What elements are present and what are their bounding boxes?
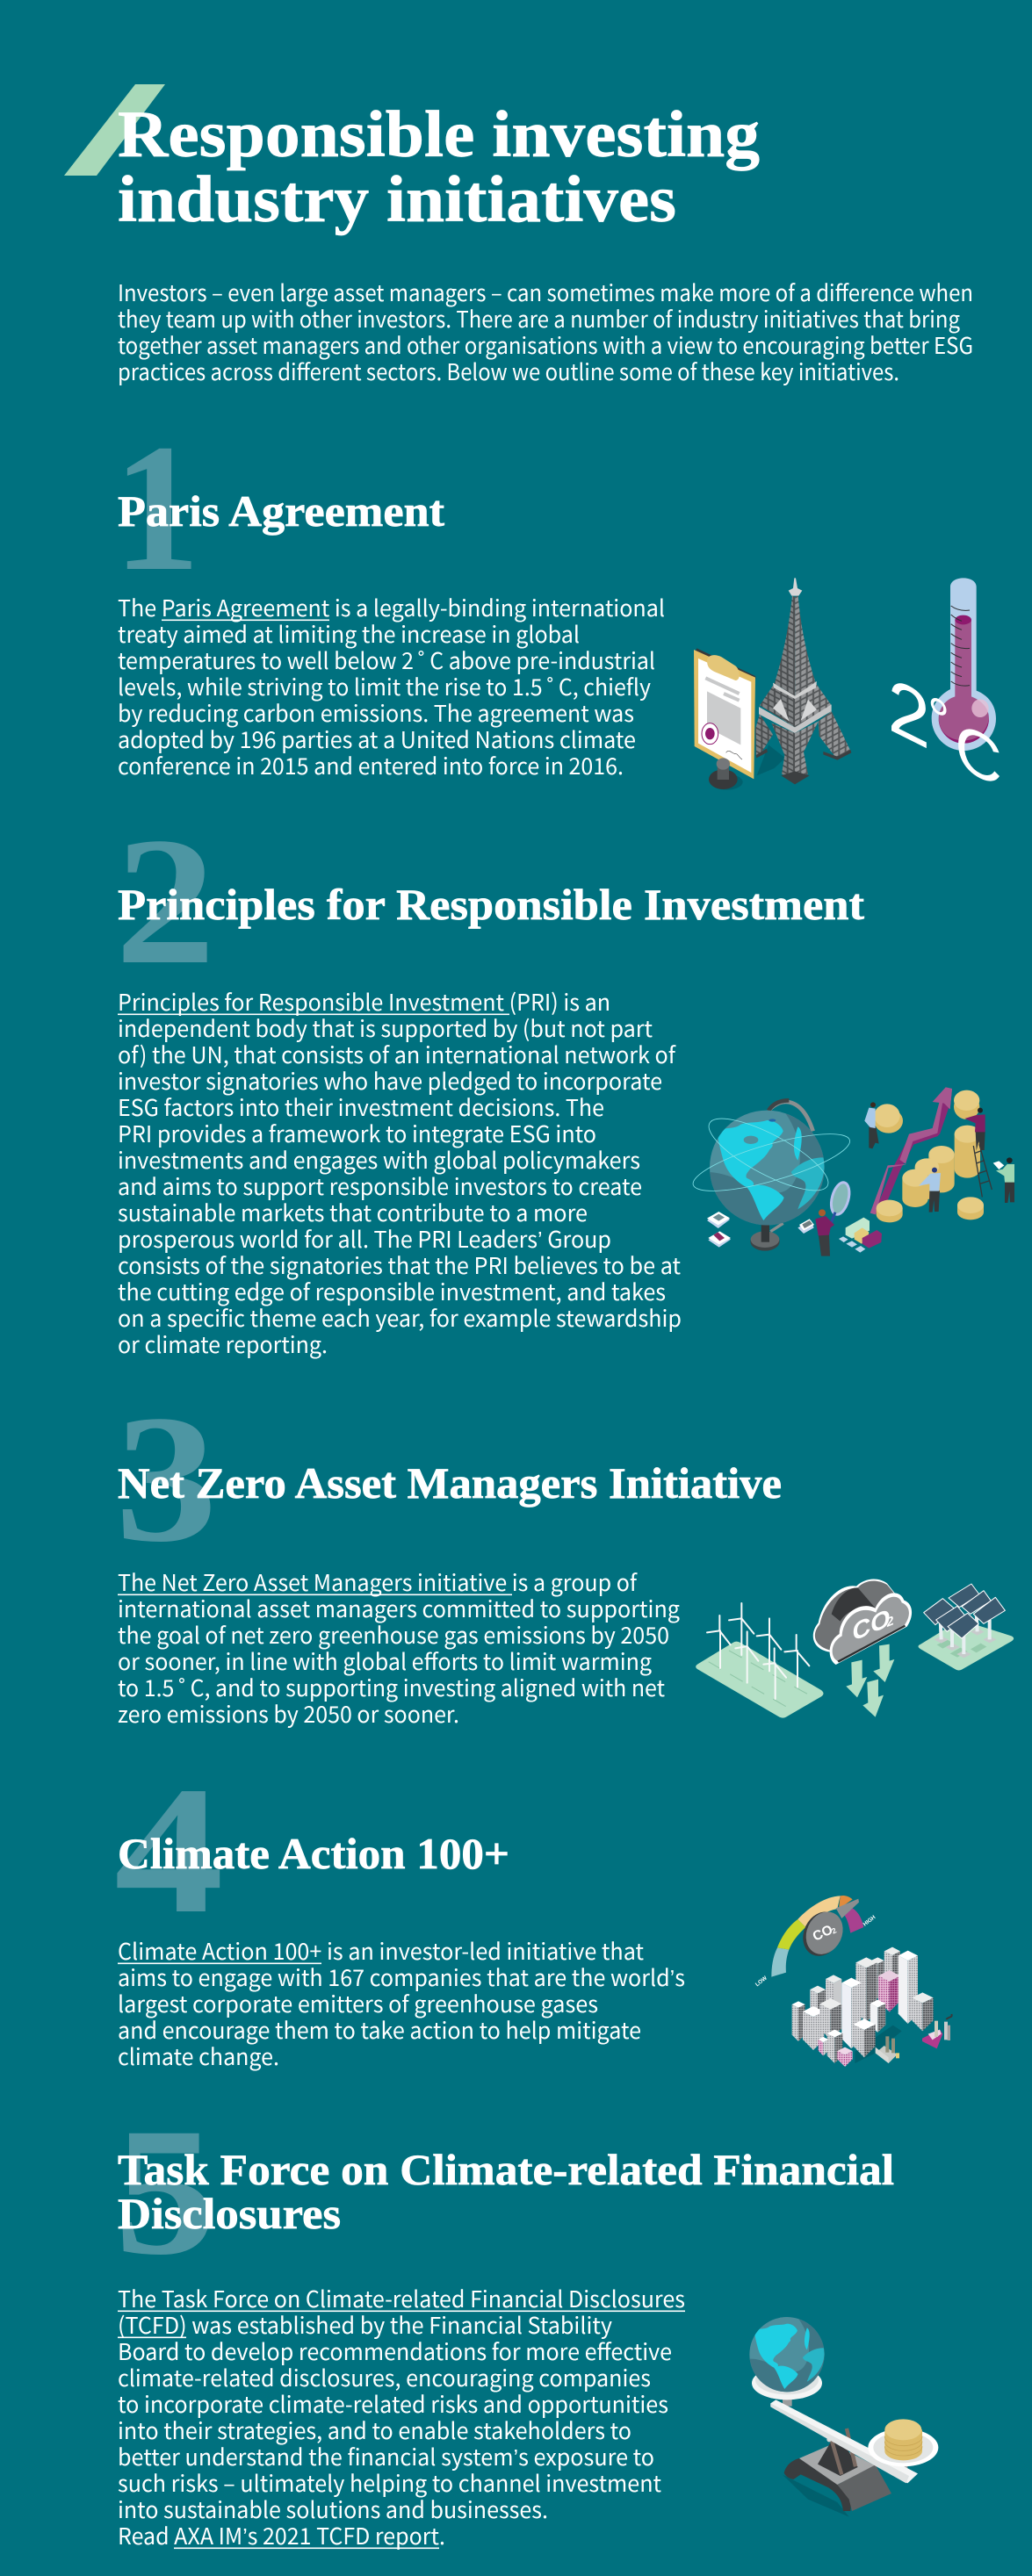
body text: Climate Action 100+: largest corporate emitters of greenhouse gases <box>118 1987 598 2019</box>
icon: person with magnifier <box>815 1181 853 1256</box>
intro text: they team up with other investors. There are a number of industry initiatives that bring <box>118 302 960 335</box>
body text: Paris Agreement: treaty aimed at limiting the increase in global <box>118 617 580 650</box>
icon: documents <box>707 1212 814 1248</box>
body text: Climate Action 100+: aims to engage with 167 companies that are the world’s <box>118 1961 685 1993</box>
body text: Net Zero: zero emissions by 2050 or sooner. <box>118 1697 459 1730</box>
body text: Climate Action 100+: and encourage them to take action to help mitigate <box>118 2013 641 2046</box>
body text: Paris Agreement: adopted by 196 parties at a United Nations climate <box>118 723 636 755</box>
panel: 2 Principles for Responsible Investment <box>115 800 1014 1360</box>
icon: rising arrow <box>870 1087 952 1214</box>
panel: 5 Task Force on Climate-related Financial Disclosures <box>118 2133 938 2550</box>
icon: clipboard, Eiffel tower and thermometer <box>694 578 1002 802</box>
icon: CO2 cloud: CO <box>853 1603 891 1647</box>
panel: 4 Climate Action 100+ <box>114 1748 952 2072</box>
icon: scale base <box>783 2428 891 2517</box>
icon: wind farm, CO2 cloud and solar panels <box>696 1579 1014 1718</box>
icon: CO2 cloud: 2 <box>886 1613 893 1630</box>
icon: blocks <box>839 1218 882 1253</box>
icon: globe <box>689 1100 855 1251</box>
header <box>64 84 973 387</box>
title: industry initiatives <box>118 163 676 236</box>
body text: PRI: on a specific theme each year, for example stewardship <box>118 1301 682 1334</box>
title: Responsible investing <box>118 98 760 171</box>
icon: globe, coins and rising arrow <box>689 1087 1014 1256</box>
body text: PRI: and aims to support responsible investors to create <box>118 1169 642 1202</box>
icon: solar panels <box>918 1584 1014 1670</box>
body text: TCFD: to incorporate climate-related risks and opportunities <box>118 2387 668 2420</box>
icon: CO2 gauge: CO <box>811 1922 835 1945</box>
body text: PRI: investor signatories who have pledged to incorporate <box>118 1064 662 1097</box>
body text: Climate Action 100+: Climate Action 100+ is an investor-led initiative that <box>118 1934 644 1967</box>
heading: Principles for Responsible Investment: Principles for Responsible Investment <box>118 880 864 929</box>
body text: TCFD: into their strategies, and to enable stakeholders to <box>118 2414 631 2446</box>
body text: Net Zero <box>118 1565 680 1730</box>
body text: Climate Action 100+ <box>118 1934 685 2072</box>
icon: CO2 gauge <box>754 1896 877 1988</box>
body text: TCFD: (TCFD) was established by the Financial Stability <box>118 2308 612 2341</box>
heading: Paris Agreement: Paris Agreement <box>118 486 444 536</box>
label: 2 degrees C: ° <box>927 682 949 756</box>
icon: coin stacks <box>874 1090 984 1222</box>
icon: CO2 gauge: LOW <box>754 1975 769 1988</box>
body text: PRI: Principles for Responsible Investment (PRI) is an <box>118 985 610 1018</box>
body text: TCFD: into sustainable solutions and businesses. <box>118 2493 548 2525</box>
icon: CO2 gauge: HIGH <box>862 1914 877 1928</box>
body text: Net Zero: to 1.5 ˚ C, and to supporting investing aligned with net <box>118 1671 665 1703</box>
number 4: 4 <box>114 1748 224 1951</box>
icon: scales with globe and coins <box>749 2317 938 2517</box>
body text: TCFD: climate-related disclosures, encouraging companies <box>118 2361 651 2393</box>
body text: TCFD: better understand the financial system’s exposure to <box>118 2440 654 2472</box>
body text: PRI: of) the UN, that consists of an international network of <box>118 1038 676 1070</box>
icon: Eiffel tower <box>755 578 851 784</box>
accent slash <box>64 84 165 176</box>
icon: down arrows <box>846 1644 894 1717</box>
heading: Task Force on Climate-related Financial Disclosures: Task Force on Climate-related Financial <box>118 2145 894 2194</box>
body text: Net Zero: international asset managers committed to supporting <box>118 1592 680 1624</box>
body text: Paris Agreement: The Paris Agreement is a legally-binding international <box>118 591 665 623</box>
body text: PRI: consists of the signatories that the PRI believes to be at <box>118 1248 681 1281</box>
label: 2 degrees C: C <box>955 706 1002 802</box>
title <box>118 98 760 236</box>
heading: Net Zero Asset Managers Initiative: Net Zero Asset Managers Initiative <box>118 1458 782 1507</box>
icon: globe on plate <box>749 2317 826 2400</box>
panel: 3 Net Zero Asset Managers Initiative <box>115 1377 1014 1730</box>
body text: Climate Action 100+: climate change. <box>118 2040 279 2072</box>
body text: Net Zero: or sooner, in line with global efforts to limit warming <box>118 1644 652 1677</box>
heading: Task Force on Climate-related Financial Disclosures <box>118 2145 894 2238</box>
intro text: Investors – even large asset managers – can sometimes make more of a difference when <box>118 276 973 308</box>
body text: PRI: investments and engages with global policymakers <box>118 1143 640 1176</box>
body text: TCFD: Board to develop recommendations for more effective <box>118 2335 672 2367</box>
body text: TCFD: Read AXA IM’s 2021 TCFD report. <box>118 2519 445 2551</box>
label: 2 degrees C: 2 <box>888 659 930 766</box>
body text: TCFD: The Task Force on Climate-related Financial Disclosures <box>118 2282 685 2314</box>
body text: Paris Agreement: conference in 2015 and entered into force in 2016. <box>118 749 624 781</box>
icon: coins on plate <box>868 2419 938 2466</box>
body text: Net Zero: the goal of net zero greenhouse gas emissions by 2050 <box>118 1618 669 1651</box>
intro text: together asset managers and other organisations with a view to encouraging better ESG <box>118 328 973 361</box>
intro text <box>118 276 973 387</box>
body text: Paris Agreement: temperatures to well below 2 ˚ C above pre-industrial <box>118 644 655 676</box>
number 3: 3 <box>115 1377 217 1579</box>
icon: scale beam <box>770 2400 918 2483</box>
body text: PRI: independent body that is supported by (but not part <box>118 1011 653 1044</box>
icon: CO2 cloud <box>813 1579 912 1665</box>
icon: clipboard with stamp <box>694 648 756 790</box>
body text: PRI: ESG factors into their investment decisions. The <box>118 1090 604 1123</box>
body text: PRI: prosperous world for all. The PRI Leaders’ Group <box>118 1222 611 1255</box>
body text: Paris Agreement: by reducing carbon emissions. The agreement was <box>118 696 634 729</box>
body text: Net Zero: The Net Zero Asset Managers initiative is a group of <box>118 1565 638 1598</box>
number 1: 1 <box>113 406 200 608</box>
body text: Paris Agreement <box>118 591 665 781</box>
panel: 1 Paris Agreement <box>113 406 1002 802</box>
body text: Paris Agreement: levels, while striving to limit the rise to 1.5 ˚ C, chiefly <box>118 670 651 702</box>
icon: factories <box>876 2014 952 2063</box>
icon: city buildings <box>792 1947 934 2067</box>
heading: Climate Action 100+: Climate Action 100+ <box>118 1829 509 1878</box>
icon: wind turbines <box>696 1603 823 1718</box>
body text: PRI: or climate reporting. <box>118 1328 328 1360</box>
label: 2 degrees C <box>888 659 1002 802</box>
icon: CO2 gauge: 2 <box>830 1925 838 1936</box>
intro text: practices across different sectors. Below we outline some of these key initiatives. <box>118 355 899 387</box>
body text: TCFD <box>118 2282 685 2551</box>
body text: PRI: sustainable markets that contribute to a more <box>118 1196 588 1228</box>
body text: PRI: the cutting edge of responsible investment, and takes <box>118 1275 666 1307</box>
body text: TCFD: such risks – ultimately helping to channel investment <box>118 2466 661 2499</box>
number 2: 2 <box>115 800 215 1003</box>
icon: people <box>864 1102 1014 1212</box>
body text: PRI <box>118 985 682 1360</box>
body text: PRI: PRI provides a framework to integrate ESG into <box>118 1117 596 1149</box>
icon: thermometer <box>932 578 996 751</box>
heading: Task Force on Climate-related Financial Disclosures: Disclosures <box>118 2189 341 2238</box>
icon: CO2 gauge and city <box>754 1896 952 2067</box>
number 5: 5 <box>114 2090 216 2292</box>
